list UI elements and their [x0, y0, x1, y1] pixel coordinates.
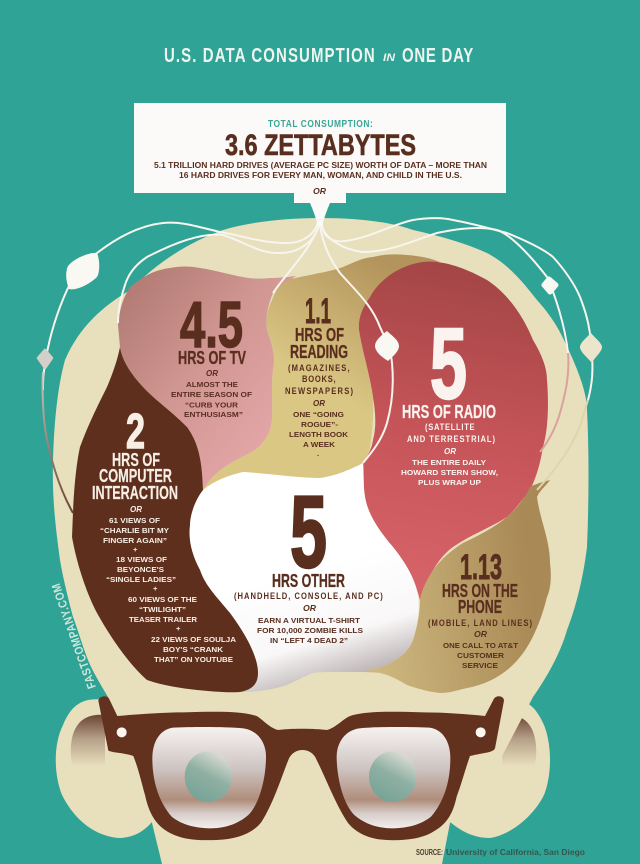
text: reading: 1.1: [305, 292, 331, 331]
text: radio: 5: [430, 308, 467, 420]
head: [53, 218, 588, 864]
text: computer: FINGER AGAIN”: [103, 536, 167, 545]
text: computer: +: [176, 624, 181, 633]
text: computer: INTERACTION: [92, 483, 178, 503]
text: reading: NEWSPAPERS): [285, 385, 353, 396]
source label: SOURCE:: [416, 848, 443, 857]
text: reading: READING: [290, 342, 348, 362]
text: computer: “TWILIGHT”: [139, 605, 186, 614]
or: OR: [313, 186, 327, 196]
title: ONE DAY: [402, 44, 473, 67]
title: IN: [383, 52, 396, 64]
text: phone: CUSTOMER: [457, 651, 505, 660]
text: reading: ONE “GOING: [293, 410, 344, 419]
glasses: [98, 696, 504, 840]
text: reading: LENGTH BOOK: [289, 430, 349, 439]
text: radio: THE ENTIRE DAILY: [412, 458, 486, 467]
right lens: [337, 727, 450, 828]
text: computer: 18 VIEWS OF: [116, 555, 167, 564]
panel: radio: [359, 262, 548, 600]
text: phone: (MOBILE, LAND LINES): [428, 617, 532, 628]
ears: [56, 699, 550, 838]
text: computer: THAT” ON YOUTUBE: [154, 655, 233, 664]
text: reading: A WEEK: [303, 440, 336, 449]
text: computer: “SINGLE LADIES”: [106, 575, 176, 584]
text: reading: HRS OF: [295, 325, 344, 345]
text: TV: 4.5: [180, 288, 243, 361]
text: other: OR: [303, 603, 317, 613]
text: radio: [401, 308, 498, 487]
description: 16 HARD DRIVES FOR EVERY MAN, WOMAN, AND CHILD IN THE U.S.: [179, 171, 462, 180]
text: TV: “CURB YOUR: [185, 400, 239, 410]
panel shape: computer: [72, 347, 258, 692]
text: computer: “CHARLIE BIT MY: [100, 526, 169, 535]
text: reading: (MAGAZINES,: [288, 362, 350, 373]
wire nodes: [38, 253, 602, 368]
title: [164, 44, 473, 67]
text: TV: [171, 288, 252, 419]
text: TV: HRS OF TV: [178, 348, 246, 368]
white box and connector: [134, 103, 506, 226]
text: phone: OR: [474, 629, 488, 639]
source name: University of California, San Diego: [446, 847, 585, 857]
text: TV: OR: [206, 368, 219, 378]
right pupil: [369, 751, 416, 802]
text: reading: ROGUE”-: [301, 420, 339, 429]
text: radio: PLUS WRAP UP: [418, 478, 481, 487]
panel: other: [189, 463, 419, 692]
text: TV: ENTIRE SEASON OF: [171, 390, 252, 399]
text: computer: OR: [130, 504, 143, 514]
total consumption box: [134, 103, 506, 226]
text: phone: 1.13: [460, 548, 502, 587]
text: computer: BEYONCE'S: [117, 565, 164, 574]
text: computer: BOY'S “CRANK: [163, 645, 224, 654]
panel: phone: [353, 480, 551, 693]
text: other: (HANDHELD, CONSOLE, AND PC): [234, 590, 383, 601]
left pupil: [185, 751, 232, 802]
left rivet: [117, 727, 127, 737]
panel shape: other: [189, 463, 419, 692]
label: total consumption: TOTAL CONSUMPTION:: [268, 118, 373, 130]
text: phone: [428, 548, 532, 670]
text: phone: PHONE: [458, 597, 502, 617]
text: other: 5: [290, 475, 327, 589]
source: [416, 847, 585, 857]
right rivet: [476, 727, 486, 737]
panel: TV: [118, 266, 296, 490]
text: phone: SERVICE: [462, 661, 498, 670]
wires: [43, 218, 592, 513]
text: computer: 22 VIEWS OF SOULJA: [151, 635, 237, 644]
text: computer: +: [133, 545, 138, 554]
text: other: IN “LEFT 4 DEAD 2”: [270, 636, 348, 645]
panel: reading: [203, 254, 440, 490]
panel shape: radio: [359, 262, 548, 600]
description: 5.1 TRILLION HARD DRIVES (AVERAGE PC SIZE) WORTH OF DATA – MORE THAN: [154, 161, 487, 170]
text: reading: BOOKS,: [302, 373, 336, 384]
panel shape: TV: [118, 266, 296, 490]
description: [154, 161, 487, 180]
text: computer: TEASER TRAILER: [129, 615, 198, 624]
frame: [98, 696, 504, 840]
text: computer: COMPUTER: [99, 466, 172, 486]
fastcompany url: FASTCOMPANY.COM: [50, 582, 99, 690]
text: computer: +: [153, 584, 158, 593]
text: computer: [92, 405, 237, 664]
panel shape: phone: [353, 480, 551, 693]
text: other: [234, 475, 383, 645]
text: radio: (SATELLITE: [425, 421, 475, 432]
text: phone: HRS ON THE: [442, 581, 518, 601]
text: other: HRS OTHER: [272, 571, 345, 591]
text: other: FOR 10,000 ZOMBIE KILLS: [257, 626, 363, 635]
text: computer: 61 VIEWS OF: [109, 516, 160, 525]
text: radio: OR: [444, 446, 457, 456]
text: TV: ENTHUSIASM”: [184, 410, 243, 419]
text: radio: AND TERRESTRIAL): [407, 433, 495, 444]
text: reading: OR: [313, 398, 326, 408]
text: radio: HRS OF RADIO: [402, 402, 496, 422]
text: computer: 2: [126, 405, 145, 459]
text: computer: HRS OF: [112, 450, 160, 470]
title: U.S. DATA CONSUMPTION: [164, 44, 375, 67]
text: computer: 60 VIEWS OF THE: [128, 595, 197, 604]
text: radio: HOWARD STERN SHOW,: [401, 468, 498, 477]
panel shape: reading: [203, 254, 440, 490]
panel: computer: [72, 347, 258, 692]
text: TV: ALMOST THE: [186, 380, 238, 389]
text: reading: [285, 292, 353, 458]
figure: 3.6 zettabytes: 3.6 ZETTABYTES: [225, 129, 416, 162]
text: reading: .: [317, 449, 319, 458]
text: other: EARN A VIRTUAL T-SHIRT: [258, 616, 360, 625]
left lens: [152, 727, 266, 828]
text: phone: ONE CALL TO AT&T: [443, 641, 518, 650]
